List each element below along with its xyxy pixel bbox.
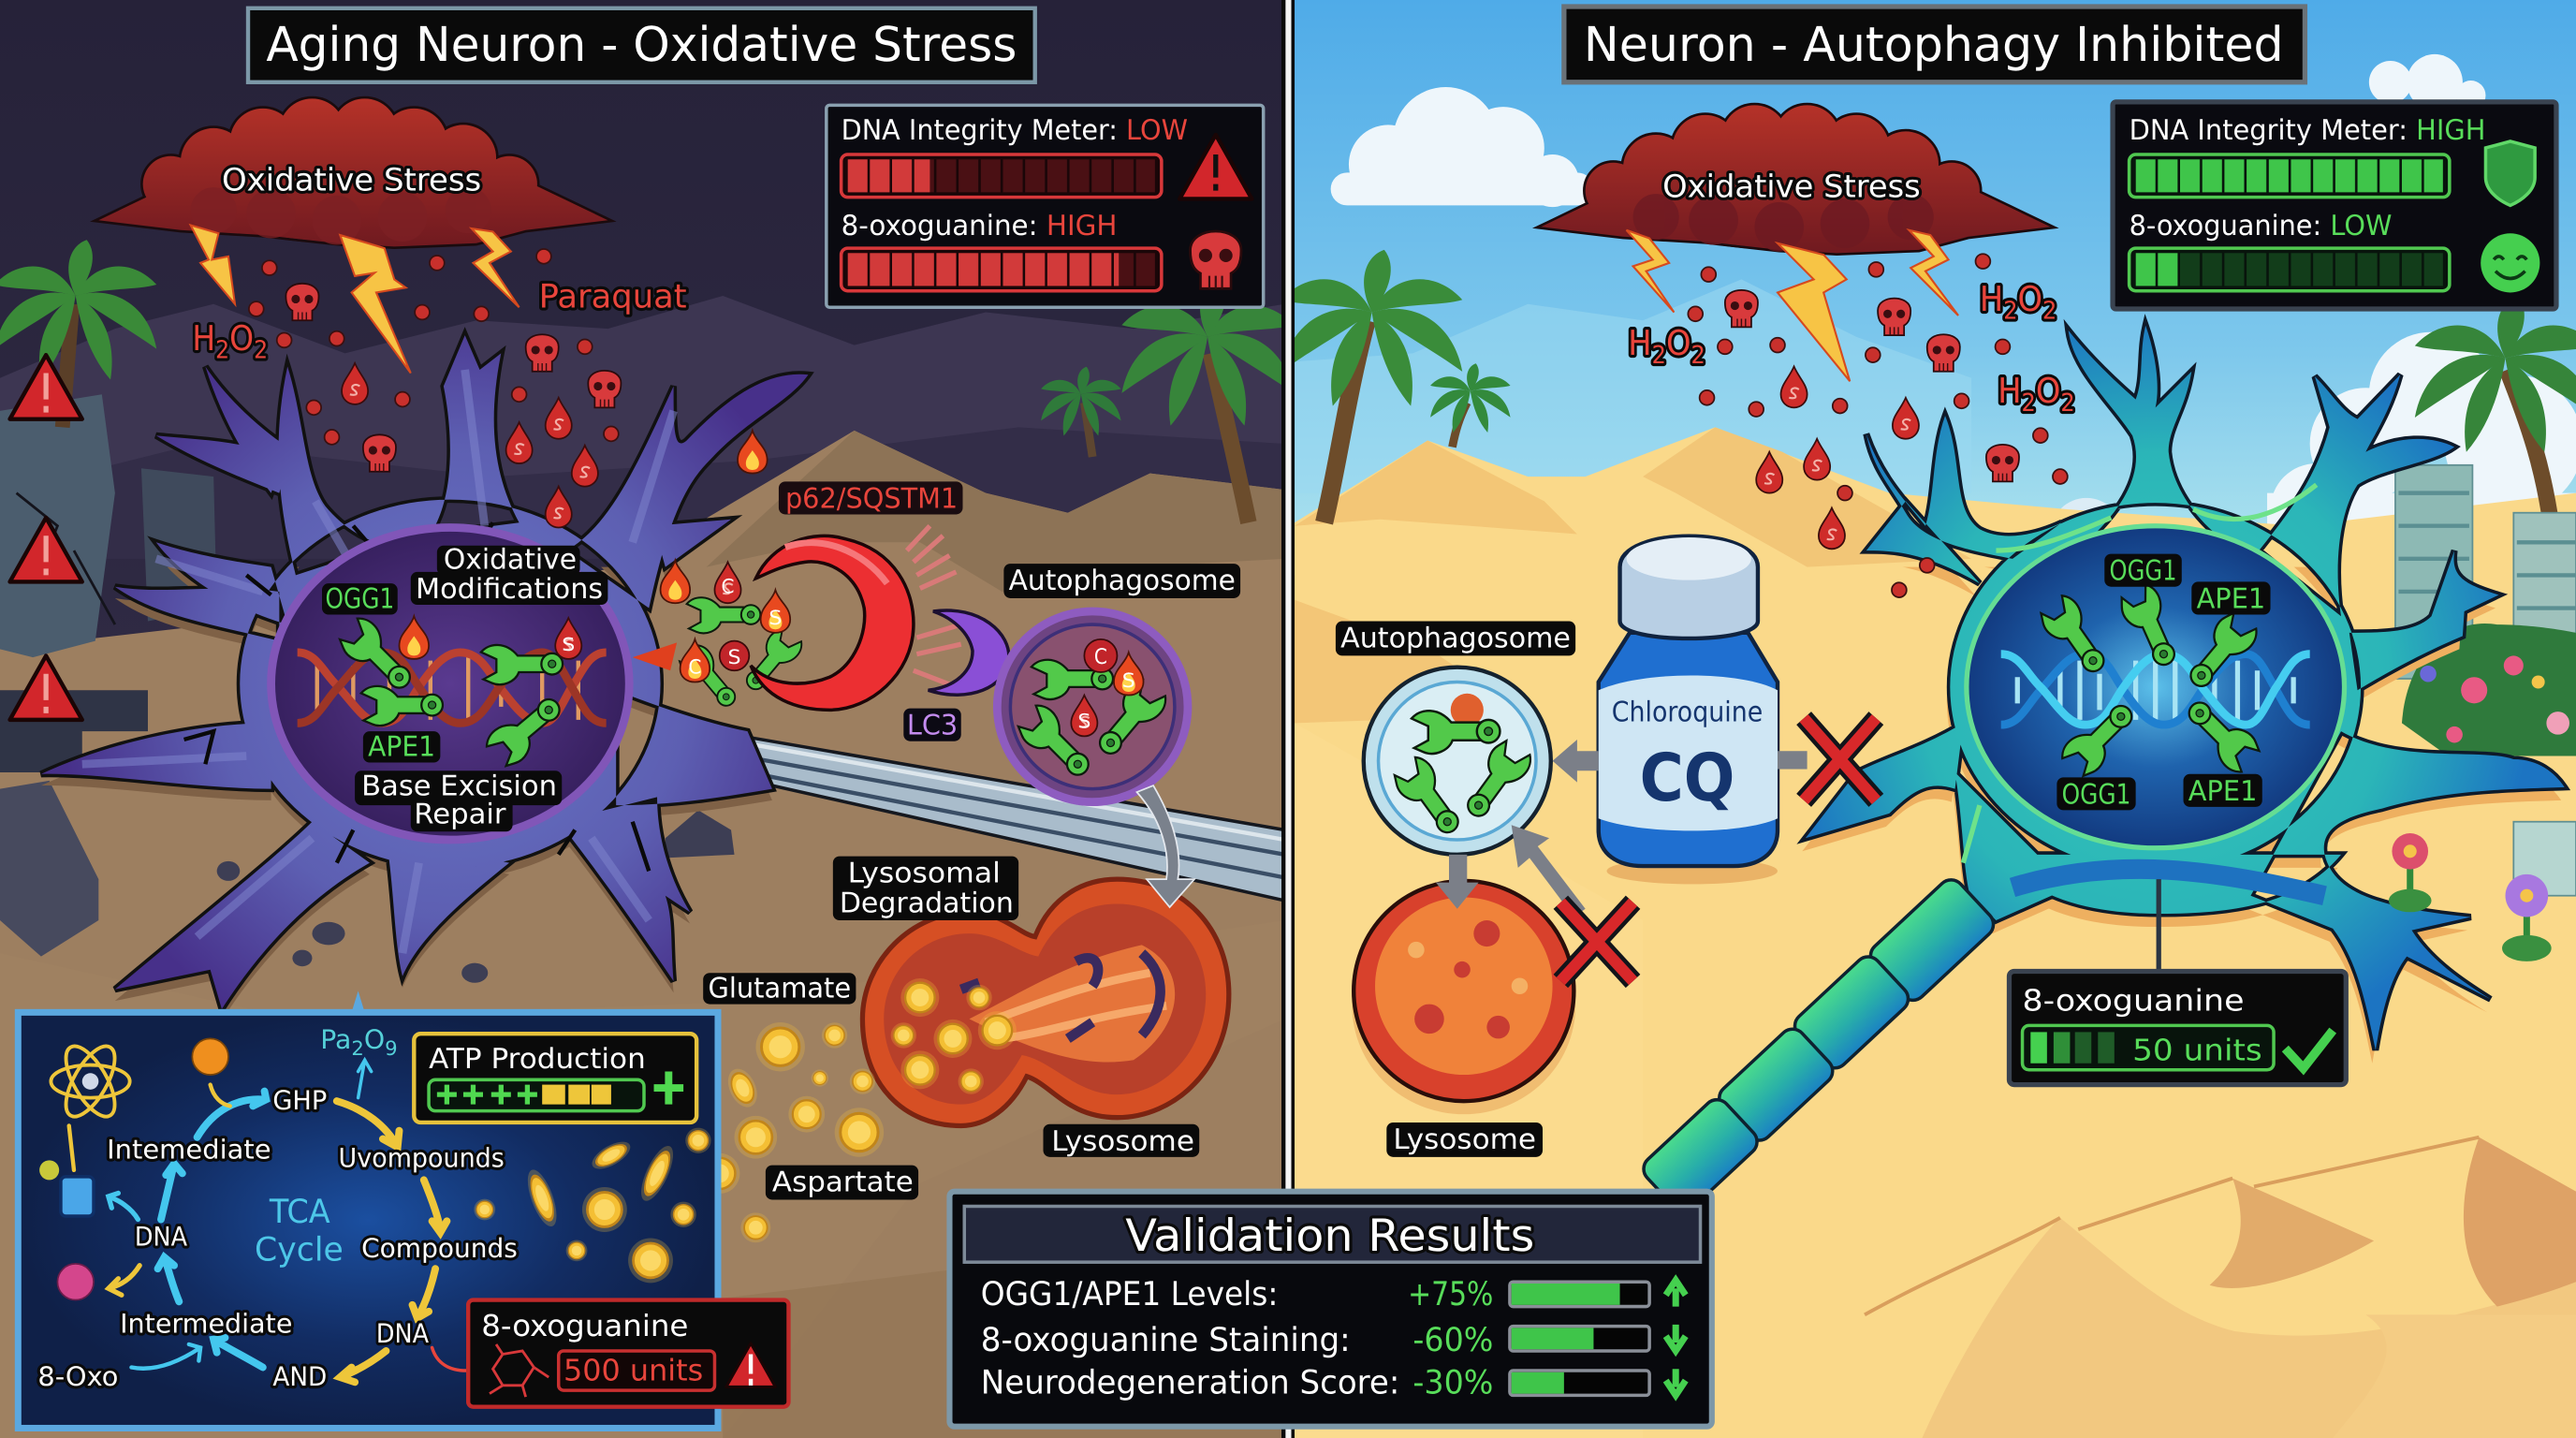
- desert ground: [0, 431, 1284, 1438]
- repair enzymes in nucleus: [2035, 581, 2264, 782]
- label: H2O2 lower: 2: [2060, 388, 2075, 418]
- ATP production meter: [414, 1034, 696, 1123]
- row: 8-oxoguanine staining: [981, 1320, 1686, 1359]
- label: Base Excision Repair: Repair: [414, 799, 506, 831]
- label: H2O2 lower: H: [1998, 372, 2024, 411]
- ruined buildings: [0, 394, 217, 957]
- autophagosome empty: [1364, 668, 1551, 855]
- TCA labels: Intermediate: [120, 1308, 292, 1340]
- label: H2O2 left: O: [1666, 324, 1690, 363]
- label: LC3: LC3: [907, 710, 958, 742]
- label: Lysosome: Lysosome: [1393, 1124, 1536, 1157]
- oxidants: skulls, drops and dots: [249, 249, 768, 527]
- storm cloud: Oxidative Stress: [222, 163, 481, 198]
- nucleus ring: [1967, 526, 2345, 848]
- 8-oxoguanine high callout: 500 units: [564, 1354, 703, 1388]
- label: OGG1: OGG1: [326, 583, 394, 616]
- label: Autophagosome: Autophagosome: [1009, 565, 1236, 598]
- DNA helix healthy: [2001, 654, 2310, 725]
- palm trees left panel: [0, 240, 1294, 522]
- TCA labels: DNA: [376, 1318, 429, 1349]
- label: APE1: APE1: [368, 731, 435, 764]
- storm cloud: [1541, 105, 2050, 253]
- panel: autophagy inhibited neuron scene: [1281, 0, 2576, 1438]
- label: Lysosome: Lysosome: [1051, 1125, 1194, 1159]
- label: OGG1 bottom: OGG1: [2062, 779, 2130, 812]
- icon: smiley: [2481, 233, 2539, 292]
- 8-oxoguanine low callout: [2009, 971, 2346, 1085]
- label: H2O2 top: O: [2018, 279, 2042, 319]
- label: Base Excision Repair: [355, 770, 562, 831]
- sand dunes: [1295, 427, 2576, 1438]
- p62 cargo cluster: C: [688, 655, 701, 679]
- lysosome intact: [1352, 881, 1575, 1114]
- myelinated axon: [1638, 874, 1998, 1216]
- TCA labels: 2: [351, 1037, 364, 1060]
- p62 cargo cluster: [633, 561, 806, 714]
- TCA labels: O: [364, 1024, 385, 1055]
- panel: aging neuron oxidative stress scene: [0, 0, 1294, 1438]
- panel: validation results: [949, 1192, 1712, 1427]
- flowers: [2389, 833, 2552, 961]
- horizon haze: [1295, 279, 1971, 493]
- p62 cargo cluster: S: [728, 646, 741, 668]
- autophagosome with cargo: [997, 611, 1188, 802]
- TCA labels: Intemediate: [107, 1134, 271, 1166]
- lysosome fusion: [862, 879, 1229, 1125]
- lightning bolts: [1627, 230, 1958, 381]
- inhibition arrows: [1436, 740, 1808, 917]
- label: H2O2 lower: O: [2036, 372, 2060, 411]
- label: H2O2: O: [229, 319, 254, 359]
- neuron: damaged cell body: [41, 335, 809, 1020]
- row: OGG1/APE1 levels: OGG1/APE1 Levels:: [981, 1273, 1278, 1313]
- label: H2O2: 2: [254, 335, 268, 365]
- icon: X block on lysosome: [1560, 902, 1633, 981]
- icon: warning: [1179, 135, 1251, 198]
- panel: TCA cycle: [18, 991, 788, 1428]
- DNA helix damaged: [298, 653, 607, 723]
- label: Oxidative Modifications: Modifications: [416, 574, 603, 607]
- storm cloud: Oxidative Stress: [1662, 169, 1921, 205]
- meter panel: aging neuron: [827, 105, 1264, 307]
- row: OGG1/APE1 levels: +75%: [1408, 1273, 1493, 1313]
- label: H2O2 left: 2: [1690, 340, 1705, 370]
- palm trees right panel: [1281, 250, 2576, 526]
- label: H2O2 top: H: [1980, 279, 2006, 319]
- p62 crescent receptor: [751, 526, 961, 710]
- meter panel: aging neuron: 8-oxoguanine: HIGH: [842, 211, 1117, 243]
- label: H2O2: 2: [215, 335, 229, 365]
- label: H2O2 top: 2: [2042, 296, 2056, 326]
- title: Neuron - Autophagy Inhibited: Neuron - Autophagy Inhibited: [1584, 17, 2284, 72]
- label: OGG1 top: OGG1: [2110, 555, 2177, 588]
- TCA labels: AND: [272, 1360, 327, 1392]
- chloroquine bottle: CQ: [1640, 741, 1734, 816]
- row: neurodegeneration score: Neurodegeneration Score:: [981, 1362, 1399, 1401]
- chloroquine bottle: Chloroquine: [1612, 697, 1763, 729]
- p62 cargo cluster: S: [768, 607, 782, 629]
- row: 8-oxoguanine staining: -60%: [1412, 1320, 1493, 1359]
- label: H2O2: H: [192, 319, 218, 359]
- icon: shield: [2485, 141, 2535, 205]
- 8-oxoguanine low callout: 50 units: [2132, 1034, 2262, 1068]
- amino acid coins: [699, 978, 1017, 1242]
- 8-oxoguanine high callout: 8-oxoguanine: [481, 1310, 688, 1344]
- label: Lysosomal Degradation: [833, 857, 1018, 920]
- neuron: healthy cell body: [1802, 326, 2565, 1064]
- title: Aging Neuron - Oxidative Stress: Aging Neuron - Oxidative Stress: [266, 17, 1017, 72]
- steel axon: [742, 736, 1284, 901]
- healthy buildings and garden: [2395, 465, 2576, 896]
- label: H2O2 lower: 2: [2022, 388, 2036, 418]
- LC3 crescent: [929, 610, 1009, 695]
- oxidants: skulls, drops and dots: [1688, 254, 2068, 597]
- autophagosome with cargo: S: [1077, 710, 1090, 733]
- TCA labels: 9: [385, 1037, 398, 1060]
- lightning bolts: [191, 225, 520, 373]
- meter panel: aging neuron: DNA Integrity Meter: LOW: [842, 115, 1188, 148]
- TCA labels: DNA: [135, 1221, 187, 1253]
- foreground dunes: [1865, 1137, 2576, 1438]
- icon: warning triangles: [10, 355, 82, 720]
- TCA labels: TCA: [268, 1192, 330, 1231]
- 8-oxoguanine high callout: [468, 1300, 788, 1407]
- label: Lysosomal Degradation: Lysosomal: [848, 858, 1001, 890]
- label: Glutamate: Glutamate: [708, 973, 851, 1005]
- TCA labels: 8-Oxo: [37, 1360, 118, 1392]
- 8-oxoguanine low callout: 8-oxoguanine: [2023, 985, 2244, 1019]
- icons: metabolites: [39, 1038, 228, 1300]
- divider between panels: [1281, 0, 1295, 1438]
- icon: X block on bottle: [1804, 718, 1876, 800]
- validation heading: Validation Results: [1125, 1211, 1534, 1262]
- icon: atom: [51, 1039, 130, 1123]
- repair enzymes in nucleus: [334, 613, 581, 771]
- label: Aspartate: Aspartate: [772, 1167, 914, 1199]
- TCA labels: Pa: [320, 1024, 351, 1055]
- label: Oxidative Modifications: Oxidative: [444, 544, 577, 577]
- meter panel: autophagy inhibited neuron: 8-oxoguanine: LOW: [2130, 211, 2393, 243]
- label: APE1 bottom: APE1: [2188, 776, 2258, 809]
- validation heading: [964, 1206, 1701, 1262]
- label: Paraquat: Paraquat: [539, 276, 687, 315]
- meter panel: autophagy inhibited neuron: DNA Integrity Meter: HIGH: [2130, 115, 2485, 148]
- TCA labels: Compounds: [361, 1233, 518, 1264]
- energy coins in panel: [474, 1128, 711, 1283]
- repair enzymes in nucleus: S: [562, 635, 575, 655]
- row: neurodegeneration score: [981, 1362, 1686, 1401]
- storm cloud: [98, 98, 607, 246]
- label: APE1 top: APE1: [2197, 583, 2265, 616]
- meter panel: autophagy inhibited neuron: [2113, 102, 2556, 309]
- autophagosome with cargo: C: [1094, 646, 1107, 670]
- label: Oxidative Modifications: [411, 544, 607, 607]
- TCA labels: Uvompounds: [339, 1142, 505, 1173]
- TCA labels: Cycle: [255, 1229, 344, 1269]
- nucleus ring: [271, 527, 629, 840]
- label: Autophagosome: Autophagosome: [1340, 623, 1571, 655]
- arrow: autophagosome to lysosome: [1137, 785, 1194, 907]
- TCA labels: GHP: [272, 1085, 328, 1116]
- autophagosome with cargo: S: [1122, 668, 1135, 692]
- label: p62/SQSTM1: p62/SQSTM1: [785, 483, 958, 516]
- TCA labels: [37, 1024, 518, 1392]
- rocks: [217, 810, 735, 983]
- label: Base Excision Repair: Base Excision: [361, 770, 557, 803]
- label: H2O2 left: H: [1628, 324, 1654, 363]
- row: neurodegeneration score: -30%: [1412, 1362, 1493, 1401]
- chloroquine bottle: [1599, 536, 1778, 884]
- row: 8-oxoguanine staining: 8-oxoguanine Staining:: [981, 1320, 1351, 1359]
- label: Lysosomal Degradation: Degradation: [840, 888, 1014, 920]
- label: H2O2 top: 2: [2003, 296, 2018, 326]
- clouds: [1331, 54, 2576, 570]
- connector line: [2158, 879, 2160, 971]
- p62 cargo cluster: C: [721, 575, 735, 598]
- row: OGG1/APE1 levels: [981, 1273, 1686, 1313]
- ATP production meter: ATP Production: [429, 1044, 646, 1077]
- label: H2O2 left: 2: [1652, 340, 1666, 370]
- TCA cycle arrows: [69, 1060, 466, 1382]
